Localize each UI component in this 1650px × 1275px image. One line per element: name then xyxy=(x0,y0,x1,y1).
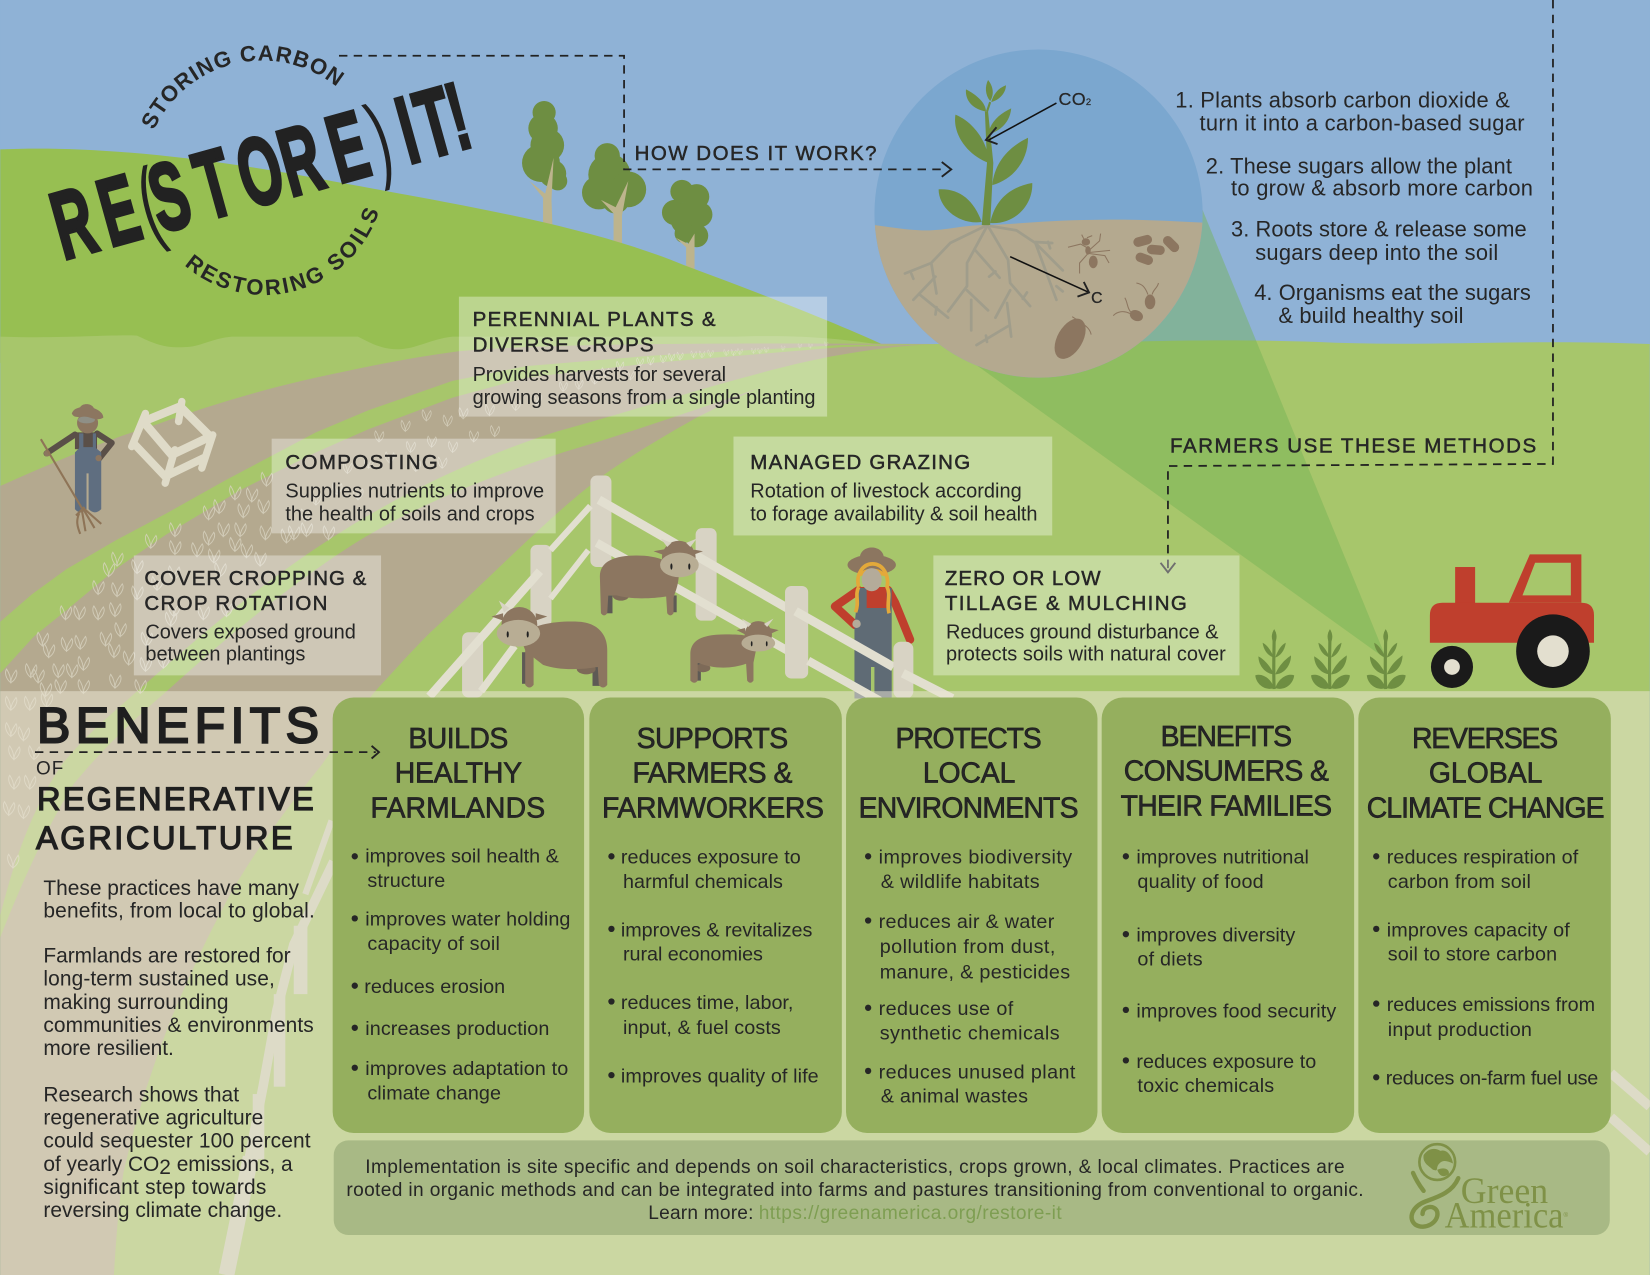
card: builds healthy farmlands: structure xyxy=(367,870,445,892)
implementation note panel: Implementation is site specific and depends on soil characteristics, crops grown, & local climates. Practices are xyxy=(365,1157,1345,1178)
panel: zero tillage: protects soils with natural cover xyxy=(946,644,1226,666)
farmer with pitchfork xyxy=(41,404,112,534)
card: supports farmers and farmworkers xyxy=(589,697,842,1133)
arms xyxy=(835,590,910,640)
intro paragraphs: significant step towards xyxy=(43,1176,266,1199)
panel: perennial plants: Provides harvests for several xyxy=(473,364,726,386)
card: reverses global climate change: reduces respiration of xyxy=(1387,847,1579,869)
card: supports farmers and farmworkers: harmful chemicals xyxy=(623,871,783,893)
shirt xyxy=(861,587,888,610)
panel: zero tillage: Reduces ground disturbance & xyxy=(946,622,1218,644)
numbered process steps: & build healthy soil xyxy=(1278,303,1464,328)
card: benefits consumers and families: CONSUMERS & xyxy=(1124,756,1329,788)
overalls xyxy=(75,433,101,512)
farmer woman xyxy=(835,548,910,699)
card: builds healthy farmlands: climate change xyxy=(367,1082,501,1104)
card: reverses global climate change: reduces emissions from xyxy=(1387,994,1595,1016)
card: benefits consumers and families: THEIR FAMILIES xyxy=(1121,790,1332,822)
intro paragraphs: long-term sustained use, xyxy=(43,968,275,991)
dashed connector: steps to methods xyxy=(1161,0,1553,572)
card: supports farmers and farmworkers: reduces time, labor, xyxy=(621,992,793,1014)
hat and hair xyxy=(848,555,896,575)
intro paragraphs: of yearly CO xyxy=(43,1153,159,1176)
card: builds healthy farmlands: BUILDS xyxy=(408,723,508,755)
lower fence running behind benefits xyxy=(226,821,1650,1275)
head and hat xyxy=(77,412,98,433)
numbered process steps: 1. Plants absorb carbon dioxide & xyxy=(1175,87,1510,112)
card: protects local environments: LOCAL xyxy=(923,758,1015,790)
back hill xyxy=(0,149,884,363)
trees xyxy=(522,101,712,276)
card: protects local environments: synthetic chemicals xyxy=(880,1022,1060,1044)
card: protects local environments: improves biodiversity xyxy=(879,847,1072,869)
card: builds healthy farmlands: increases production xyxy=(365,1018,549,1040)
logo: Green America: America xyxy=(1445,1194,1563,1235)
panel: zero tillage xyxy=(933,555,1239,675)
card: benefits consumers and families: quality of food xyxy=(1137,871,1264,893)
card: reverses global climate change: soil to store carbon xyxy=(1388,943,1557,965)
panel: zero tillage: TILLAGE & MULCHING xyxy=(945,592,1187,615)
card: reverses global climate change: improves capacity of xyxy=(1387,919,1570,941)
plant cross-section circle xyxy=(868,49,1210,384)
cow front-right xyxy=(690,619,779,683)
arc text: restoring soils: RESTORING SOILS xyxy=(185,208,378,296)
foreground fence rails xyxy=(796,611,952,701)
hands xyxy=(44,450,50,457)
panel: cover cropping: Covers exposed ground xyxy=(145,622,356,644)
panel: managed grazing xyxy=(733,437,1052,535)
rails xyxy=(429,500,800,696)
roots xyxy=(905,226,1063,345)
card: benefits consumers and families: toxic chemicals xyxy=(1137,1075,1274,1097)
intro paragraphs: 2 xyxy=(159,1156,171,1179)
card: builds healthy farmlands: improves water holding xyxy=(365,909,570,931)
dirt road xyxy=(0,344,935,1275)
intro paragraphs: emissions, a xyxy=(171,1153,293,1176)
icon: pill bug xyxy=(1048,313,1092,364)
card: supports farmers and farmworkers: reduces exposure to xyxy=(621,847,801,869)
circle sky xyxy=(874,49,1203,378)
card: supports farmers and farmworkers: FARMWORKERS xyxy=(602,792,824,824)
field stripe upper xyxy=(0,344,935,673)
pitchfork xyxy=(41,439,101,534)
fence and livestock xyxy=(429,475,808,697)
benefits heading xyxy=(36,698,319,856)
card: builds healthy farmlands: HEALTHY xyxy=(395,758,522,790)
intro paragraphs: could sequester 100 percent xyxy=(43,1130,311,1153)
panel: managed grazing: Rotation of livestock according xyxy=(750,481,1022,503)
card: protects local environments: reduces air & water xyxy=(879,911,1055,933)
numbered process steps xyxy=(1175,87,1533,328)
implementation note panel: https://greenamerica.org/restore-it xyxy=(759,1203,1062,1224)
card: builds healthy farmlands: improves soil health & xyxy=(365,846,559,868)
benefits backdrop xyxy=(0,691,1650,1275)
panel: perennial plants xyxy=(459,297,827,417)
card: benefits consumers and families: improves diversity xyxy=(1136,925,1295,947)
dashed connector: benefits to cards xyxy=(35,746,379,758)
cow front-left xyxy=(492,601,607,687)
arc text: storing carbon: STORING CARBON xyxy=(142,46,344,128)
panel: perennial plants: PERENNIAL PLANTS & xyxy=(473,308,716,331)
card: protects local environments: & wildlife habitats xyxy=(881,871,1040,893)
card: supports farmers and farmworkers: improves quality of life xyxy=(621,1065,819,1087)
card: reverses global climate change: reduces on-farm fuel use xyxy=(1386,1068,1598,1090)
card: benefits consumers and families: of diets xyxy=(1137,949,1203,971)
globe xyxy=(1419,1144,1455,1180)
card: reverses global climate change: carbon from soil xyxy=(1388,871,1531,893)
cow back xyxy=(600,539,703,615)
intro paragraphs: Farmlands are restored for xyxy=(43,945,291,968)
card: reverses global climate change: input production xyxy=(1388,1019,1532,1041)
card: supports farmers and farmworkers: rural economies xyxy=(623,943,763,965)
numbered process steps: sugars deep into the soil xyxy=(1255,240,1498,265)
panel: cover cropping: between plantings xyxy=(145,644,305,666)
crop rows xyxy=(3,342,828,868)
card: protects local environments: ENVIRONMENTS xyxy=(859,792,1079,824)
numbered process steps: 4. Organisms eat the sugars xyxy=(1254,280,1531,305)
icon: nematodes xyxy=(1113,283,1158,323)
plant xyxy=(939,80,1032,225)
label: how does it work: HOW DOES IT WORK? xyxy=(635,142,877,165)
card: benefits consumers and families: improves nutritional xyxy=(1136,847,1309,869)
numbered process steps: 2. These sugars allow the plant xyxy=(1206,154,1512,179)
panel: managed grazing: to forage availability & soil health xyxy=(750,504,1038,526)
panel: perennial plants: DIVERSE CROPS xyxy=(473,333,654,356)
panel: composting: COMPOSTING xyxy=(285,451,438,474)
shirt and arms xyxy=(47,433,112,459)
field stripe lower xyxy=(0,344,935,937)
card: reverses global climate change: CLIMATE CHANGE xyxy=(1367,792,1605,824)
benefits heading: BENEFITS xyxy=(37,698,319,754)
arrow: CO2 into plant xyxy=(986,89,1091,144)
numbered process steps: to grow & absorb more carbon xyxy=(1231,176,1533,201)
card: benefits consumers and families xyxy=(1102,697,1354,1133)
card: builds healthy farmlands: FARMLANDS xyxy=(371,792,545,824)
hands xyxy=(852,620,861,628)
face xyxy=(862,568,882,591)
overalls xyxy=(854,588,892,699)
intro paragraphs: Research shows that xyxy=(43,1083,239,1106)
benefits heading: REGENERATIVE xyxy=(37,780,314,817)
intro paragraphs: reversing climate change. xyxy=(43,1199,282,1222)
panel: managed grazing: MANAGED GRAZING xyxy=(750,451,970,474)
panel: composting: Supplies nutrients to improve xyxy=(285,481,544,503)
lower field xyxy=(0,335,1650,1275)
numbered process steps: turn it into a carbon-based sugar xyxy=(1200,110,1525,135)
panel: cover cropping: CROP ROTATION xyxy=(144,592,327,615)
label: farmers use these methods: FARMERS USE THESE METHODS xyxy=(1170,434,1536,457)
compost frame xyxy=(132,402,213,483)
card: protects local environments xyxy=(846,697,1097,1133)
panel: cover cropping: COVER CROPPING & xyxy=(144,567,367,590)
card: reverses global climate change xyxy=(1358,697,1611,1133)
intro paragraphs: communities & environments xyxy=(43,1014,314,1037)
swirl xyxy=(1412,1173,1458,1227)
card: protects local environments: & animal wastes xyxy=(881,1085,1028,1107)
title logo xyxy=(40,46,481,296)
benefits heading: AGRICULTURE xyxy=(36,819,293,856)
dashed connector: title to how does it work xyxy=(339,56,951,177)
intro paragraphs xyxy=(43,877,315,1222)
panel: composting xyxy=(272,439,556,533)
card: benefits consumers and families: improves food security xyxy=(1136,1000,1336,1022)
main title: RE(STORE)IT! xyxy=(40,61,481,280)
numbered process steps: 3. Roots store & release some xyxy=(1231,217,1527,242)
icon: soil pellets xyxy=(1132,234,1181,266)
sprouts row xyxy=(1255,629,1406,689)
card: protects local environments: reduces use of xyxy=(879,998,1014,1020)
card: reverses global climate change: GLOBAL xyxy=(1429,758,1542,790)
card: protects local environments: pollution from dust, xyxy=(880,936,1055,958)
tractor xyxy=(1430,554,1594,688)
panel: perennial plants: growing seasons from a single planting xyxy=(473,387,816,409)
intro paragraphs: These practices have many xyxy=(43,877,300,900)
card: supports farmers and farmworkers: FARMERS & xyxy=(632,758,792,790)
soil xyxy=(868,220,1210,384)
logo: Green America: ® xyxy=(1563,1211,1568,1219)
spotlight cone from plant to diagram xyxy=(973,200,1387,660)
card: builds healthy farmlands: capacity of soil xyxy=(367,933,500,955)
panel: cover cropping xyxy=(134,555,381,675)
card: benefits consumers and families: BENEFITS xyxy=(1161,721,1292,753)
card: supports farmers and farmworkers: SUPPORTS xyxy=(637,723,788,755)
card: benefits consumers and families: reduces exposure to xyxy=(1136,1051,1316,1073)
card: builds healthy farmlands xyxy=(333,697,584,1133)
implementation note panel xyxy=(334,1140,1610,1235)
intro paragraphs: regenerative agriculture xyxy=(43,1107,263,1130)
card: reverses global climate change: REVERSES xyxy=(1412,723,1558,755)
intro paragraphs: making surrounding xyxy=(43,991,229,1014)
card: protects local environments: PROTECTS xyxy=(895,723,1042,755)
card: protects local environments: reduces unused plant xyxy=(879,1061,1076,1083)
card: builds healthy farmlands: improves adaptation to xyxy=(365,1058,568,1080)
benefits heading: OF xyxy=(36,758,63,779)
back posts xyxy=(462,475,717,697)
intro paragraphs: benefits, from local to global. xyxy=(43,899,315,922)
arrow: carbon into soil: C xyxy=(1091,290,1103,307)
icon: ant xyxy=(1068,234,1110,274)
card: supports farmers and farmworkers: improves & revitalizes xyxy=(621,919,812,941)
panel: composting: the health of soils and crops xyxy=(285,504,535,526)
panel: zero tillage: ZERO OR LOW xyxy=(945,567,1101,590)
card: supports farmers and farmworkers: input, & fuel costs xyxy=(623,1017,781,1039)
post right xyxy=(785,586,808,679)
card: protects local environments: manure, & pesticides xyxy=(880,961,1070,983)
card: builds healthy farmlands: reduces erosion xyxy=(364,976,505,998)
arrow: carbon into soil xyxy=(1010,257,1103,307)
logo: Green America: Green xyxy=(1461,1170,1548,1211)
intro paragraphs: more resilient. xyxy=(43,1037,174,1060)
implementation note panel: Learn more: xyxy=(648,1203,753,1224)
arrow: CO2 into plant: CO2 xyxy=(1059,89,1091,109)
implementation note panel: rooted in organic methods and can be integrated into farms and pastures transitioning from conventional to organic. xyxy=(346,1180,1364,1201)
logo: Green America xyxy=(1412,1144,1568,1235)
